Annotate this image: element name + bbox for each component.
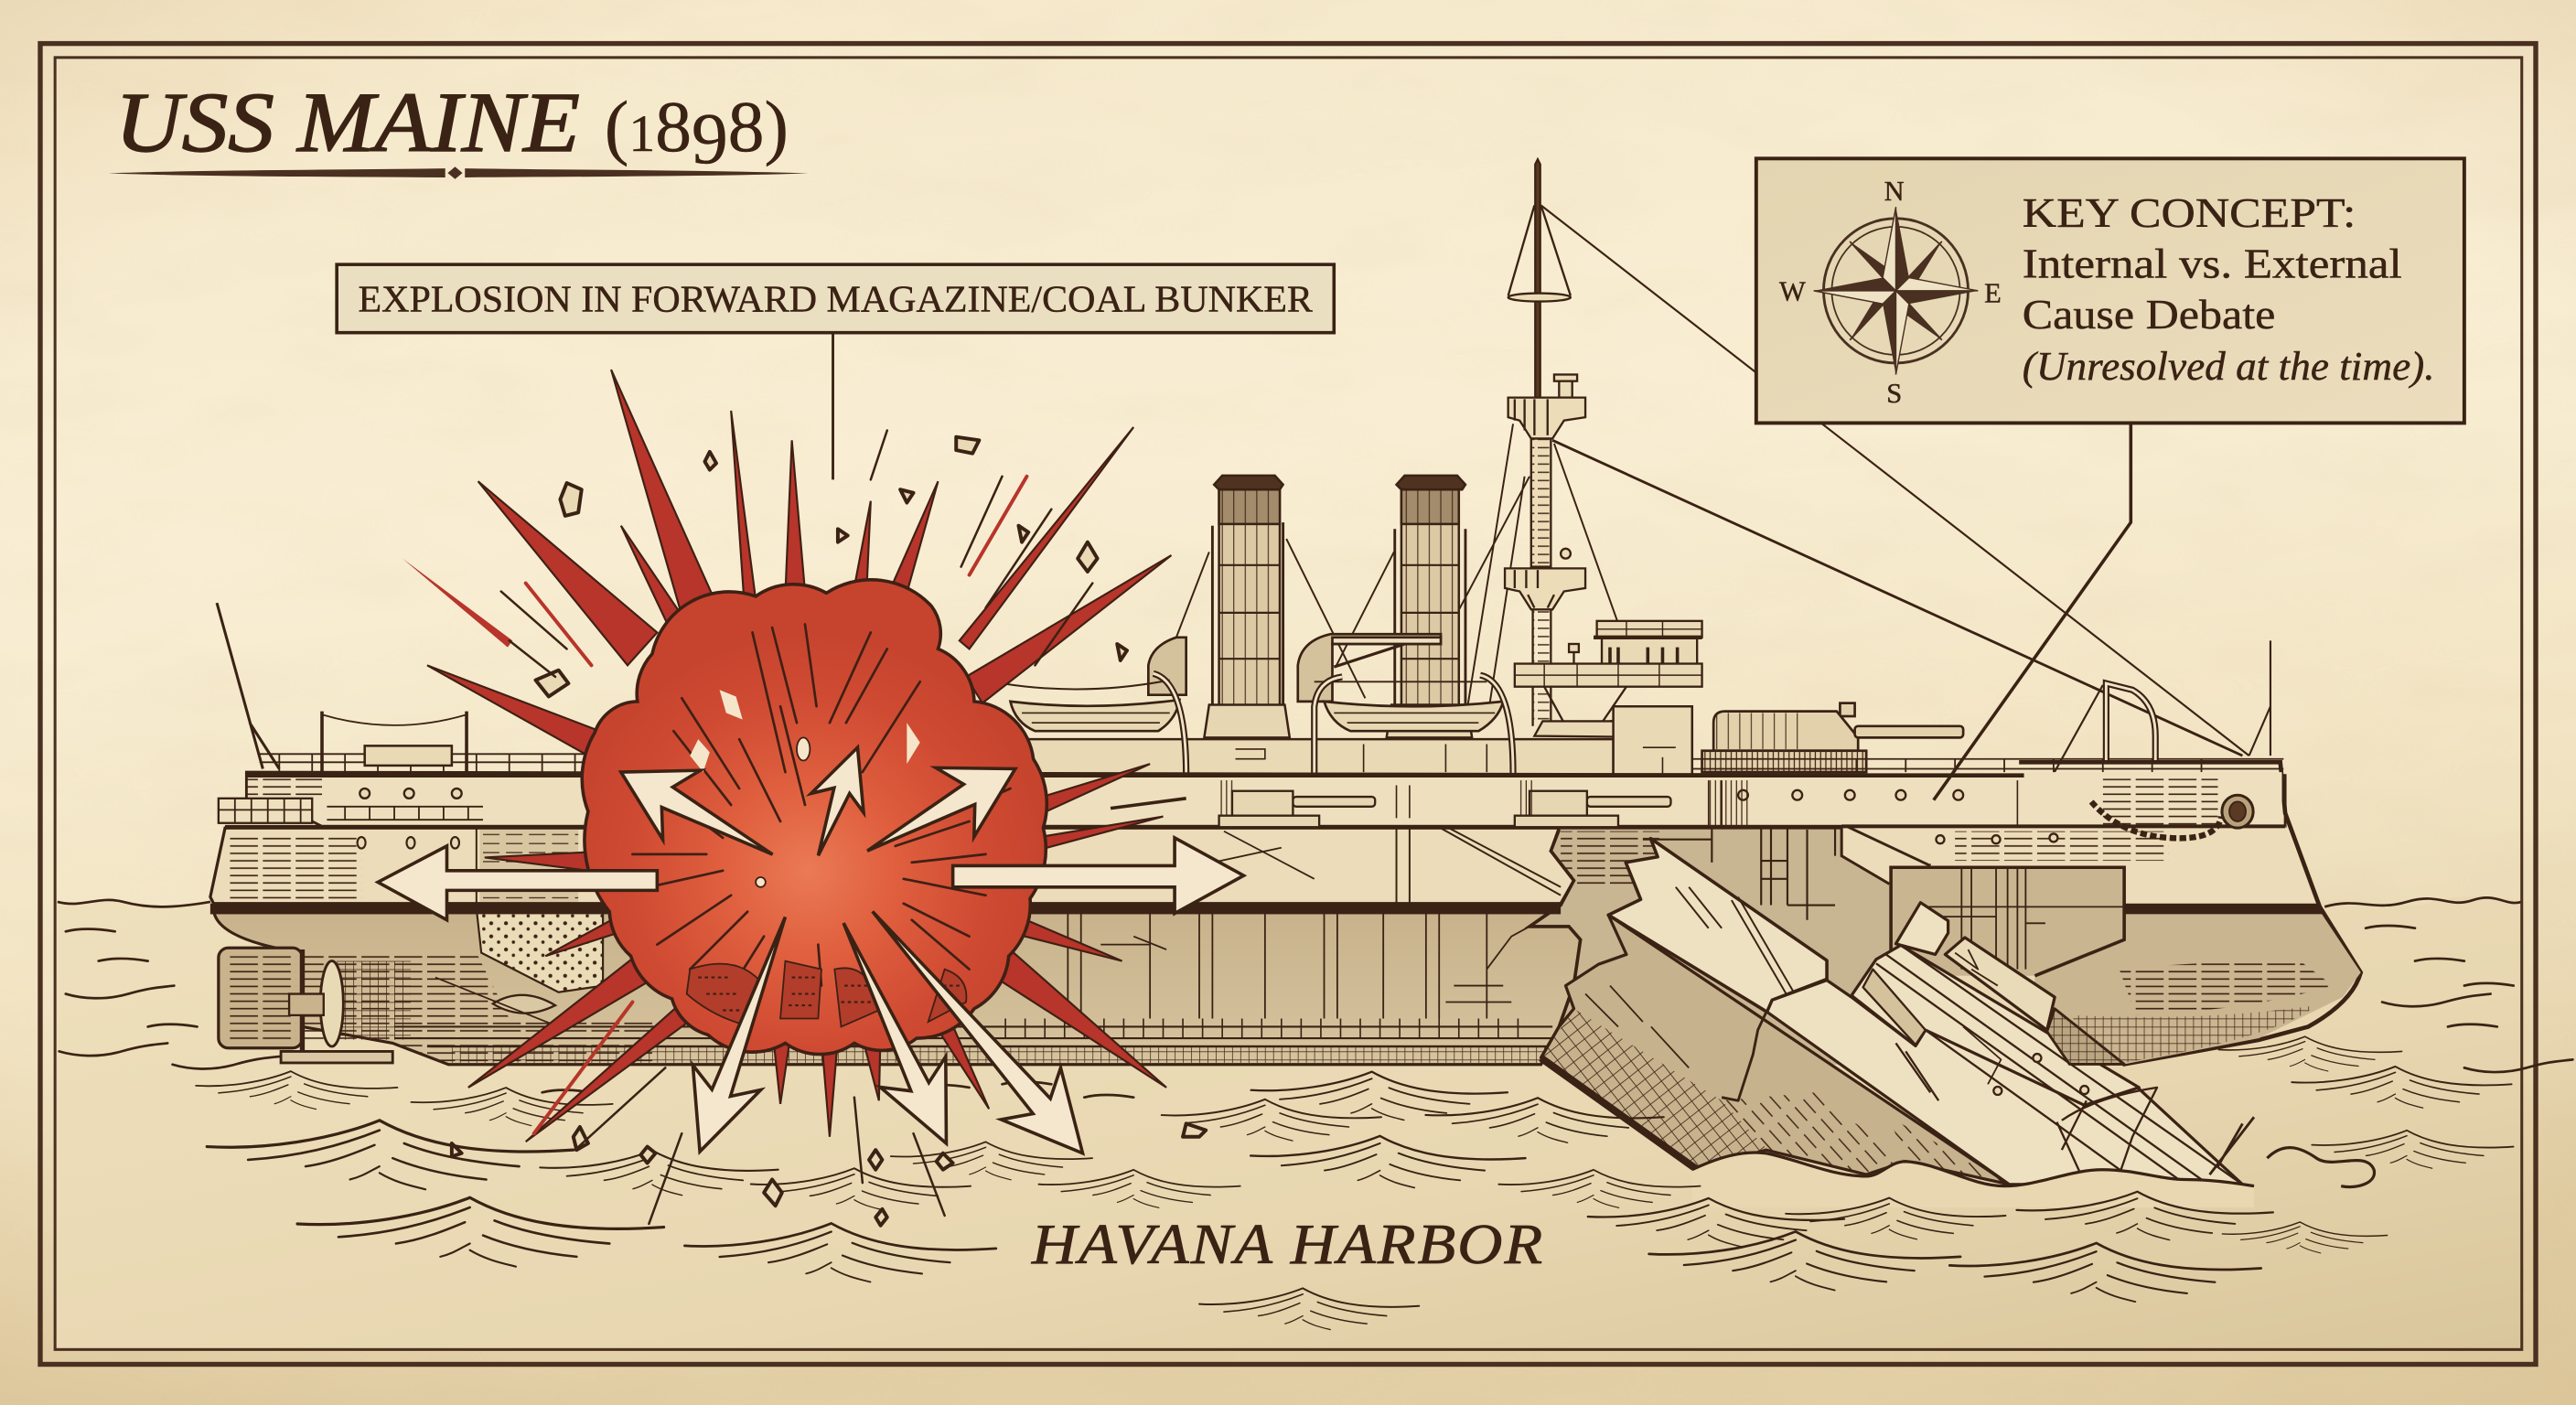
boat davits (1154, 673, 2155, 776)
arrow: upward blast (792, 738, 884, 865)
rubble at fireball base (687, 961, 966, 1026)
explosion spikes (402, 370, 1171, 1142)
key concept text: (Unresolved at the time). (2023, 343, 2435, 389)
arrow: westward blast (378, 846, 657, 920)
icon: compass rose (1779, 176, 2002, 409)
arrow: down-right blast (843, 885, 1112, 1179)
icon: compass rose: W (1779, 276, 1806, 307)
key concept text: KEY CONCEPT: (2023, 189, 2356, 236)
ship rigging (1176, 205, 2249, 756)
title (115, 76, 789, 179)
icon: compass rose: S (1886, 378, 1902, 409)
bridge and chart house (1515, 621, 1702, 737)
explosion fireball (582, 580, 1046, 1055)
key concept text: Cause Debate (2023, 291, 2275, 338)
harbor label: HAVANA HARBOR (1031, 1214, 1544, 1276)
arrow: downward blast (810, 907, 979, 1159)
forward turret (1702, 703, 1963, 772)
title: 8 (728, 88, 765, 167)
title: ) (765, 88, 789, 167)
arrow: up-right blast (848, 735, 1035, 885)
title: 9 (692, 100, 728, 179)
title divider (109, 166, 809, 179)
blast arrows (378, 735, 1244, 1179)
icon: compass rose: N (1884, 176, 1905, 207)
explosion label box: EXPLOSION IN FORWARD MAGAZINE/COAL BUNKER (359, 277, 1313, 319)
title: (18 (605, 88, 692, 167)
main hull above waterline, stern section (210, 826, 1573, 914)
key concept leader line (1934, 424, 2131, 800)
arrow: eastward blast (953, 838, 1244, 914)
explosion label box (337, 264, 1334, 333)
superstructure deck and rails (217, 603, 2283, 788)
key concept text: Internal vs. External (2023, 241, 2402, 287)
mast (1505, 159, 1585, 726)
bow section of hull (1841, 762, 2361, 1065)
upper deck band with portholes (219, 772, 2285, 827)
sunken bow wreck (1541, 839, 2254, 1207)
blast speed lines (501, 431, 1092, 1224)
harbor water surface (56, 896, 2522, 1350)
title: USS MAINE (115, 76, 580, 170)
casemate guns (1219, 780, 2098, 827)
waves (59, 926, 2572, 1330)
hull interior behind break (1528, 826, 1955, 1065)
torn hull edge (1530, 830, 1581, 1058)
hot sparks (690, 690, 920, 772)
ventilator cowls (1148, 634, 1441, 702)
blast streak lines (632, 624, 1010, 1003)
lower hull below waterline, stern section (213, 908, 1581, 1065)
flying debris (452, 437, 1206, 1226)
key concept callout (1756, 158, 2464, 423)
key concept text (2023, 189, 2435, 389)
explosion label leader line (832, 334, 834, 479)
arrow: down-left blast (666, 905, 820, 1164)
arrow: up-left blast (602, 737, 791, 889)
funnels (1204, 476, 1472, 737)
icon: compass rose: E (1984, 277, 2002, 308)
lifeboats (1003, 681, 1503, 731)
